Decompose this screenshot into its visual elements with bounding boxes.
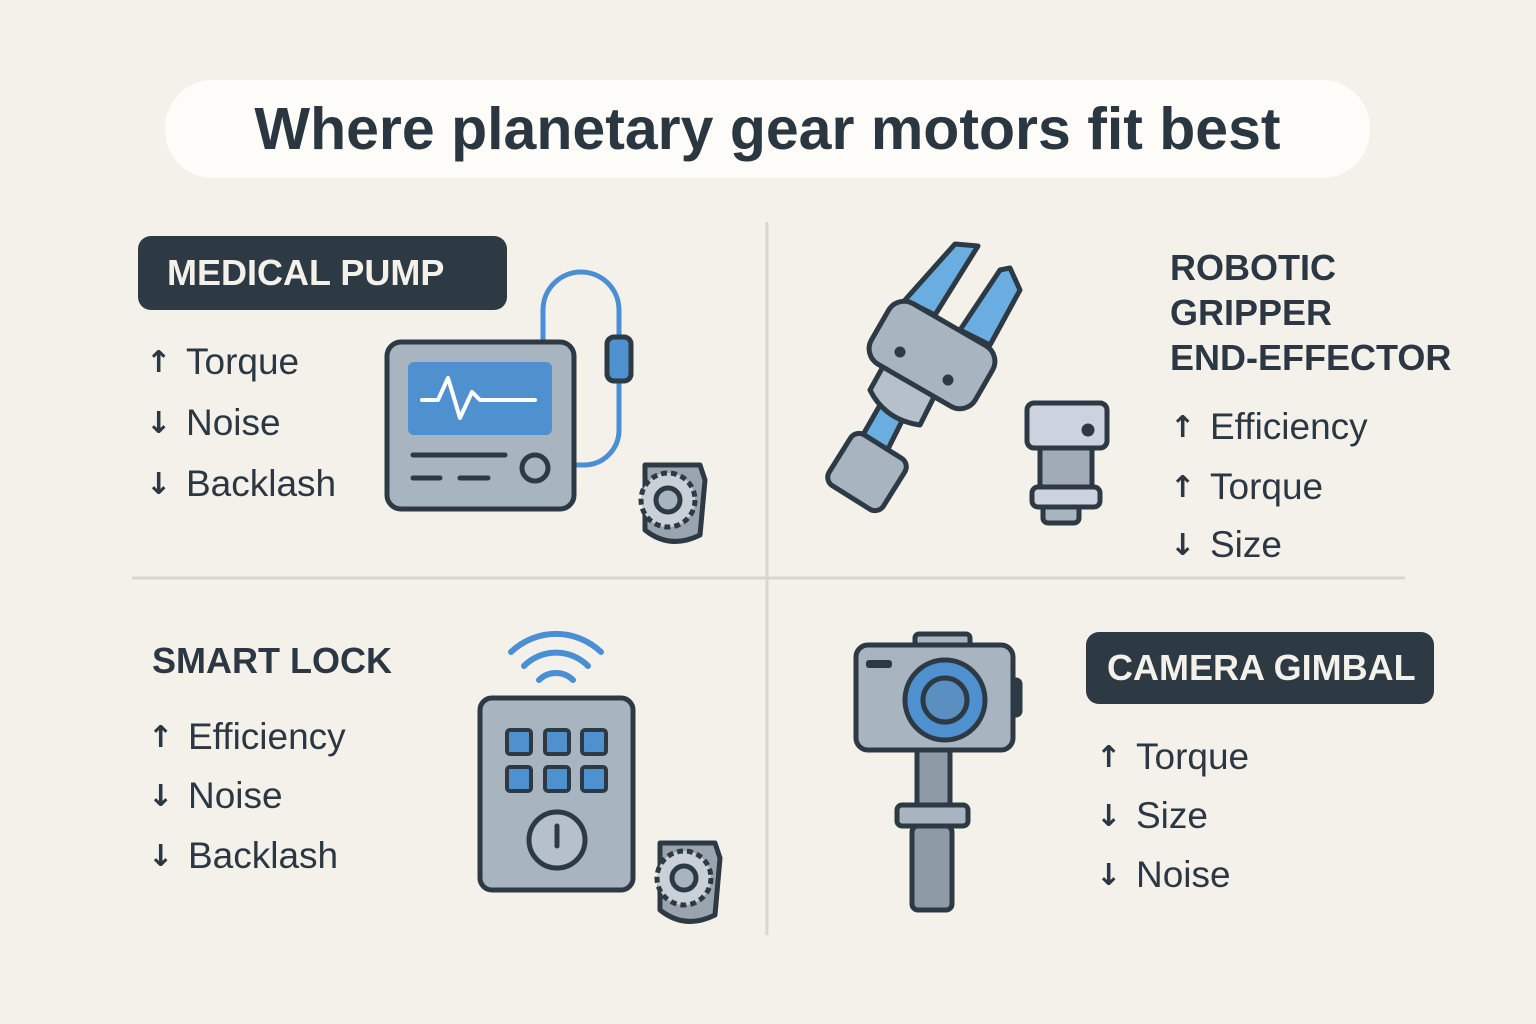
list: robotic gripper: ↑ <box>1170 470 1195 505</box>
icon: robotic gripper <box>824 244 1020 514</box>
list: camera gimbal: ↓ <box>1096 799 1121 834</box>
list: smart lock: Backlash <box>188 835 338 876</box>
list: robotic gripper: Efficiency <box>1210 406 1368 447</box>
list: camera gimbal: ↑ <box>1096 740 1121 775</box>
list: smart lock: Efficiency <box>188 716 346 757</box>
list: medical pump: ↑ <box>146 345 171 380</box>
list: medical pump: ↓ <box>146 467 171 502</box>
list: robotic gripper: ↓ <box>1170 528 1195 563</box>
panel: smart lock <box>148 640 392 876</box>
icon: camera gimbal <box>856 634 1020 910</box>
panel: camera gimbal <box>1086 632 1434 895</box>
list: smart lock <box>148 716 346 876</box>
label: medical pump: MEDICAL PUMP <box>167 252 444 293</box>
icon: gear motor 1 <box>641 465 705 541</box>
list: medical pump: ↓ <box>146 406 171 441</box>
heading: robotic gripper: GRIPPER <box>1170 292 1332 333</box>
label: medical pump <box>138 236 507 310</box>
list: robotic gripper <box>1170 406 1368 565</box>
list: camera gimbal <box>1096 736 1249 895</box>
heading: robotic gripper <box>1170 247 1451 378</box>
list: camera gimbal: ↓ <box>1096 858 1121 893</box>
list: smart lock: ↓ <box>148 839 173 874</box>
list: camera gimbal: Torque <box>1136 736 1249 777</box>
icon: gear motor 2 <box>657 843 720 921</box>
list: medical pump: Noise <box>186 402 281 443</box>
icon: small motor <box>1027 403 1107 523</box>
label: camera gimbal: CAMERA GIMBAL <box>1107 647 1416 688</box>
list: robotic gripper: Torque <box>1210 466 1323 507</box>
list: medical pump: Backlash <box>186 463 336 504</box>
list: medical pump <box>146 341 336 504</box>
heading: robotic gripper: ROBOTIC <box>1170 247 1336 288</box>
label: camera gimbal <box>1086 632 1434 704</box>
panel: medical pump <box>138 236 507 504</box>
list: smart lock: ↑ <box>148 720 173 755</box>
icon: medical pump <box>387 272 631 509</box>
list: robotic gripper: ↑ <box>1170 410 1195 445</box>
icon: smart lock <box>480 634 633 890</box>
title: Where planetary gear motors fit best <box>254 96 1281 162</box>
list: medical pump: Torque <box>186 341 299 382</box>
heading: smart lock: SMART LOCK <box>152 640 392 681</box>
list: camera gimbal: Noise <box>1136 854 1231 895</box>
heading: robotic gripper: END-EFFECTOR <box>1170 337 1451 378</box>
list: robotic gripper: Size <box>1210 524 1282 565</box>
title <box>165 80 1370 178</box>
panel: robotic gripper <box>1170 247 1451 565</box>
list: smart lock: ↓ <box>148 779 173 814</box>
list: smart lock: Noise <box>188 775 283 816</box>
list: camera gimbal: Size <box>1136 795 1208 836</box>
